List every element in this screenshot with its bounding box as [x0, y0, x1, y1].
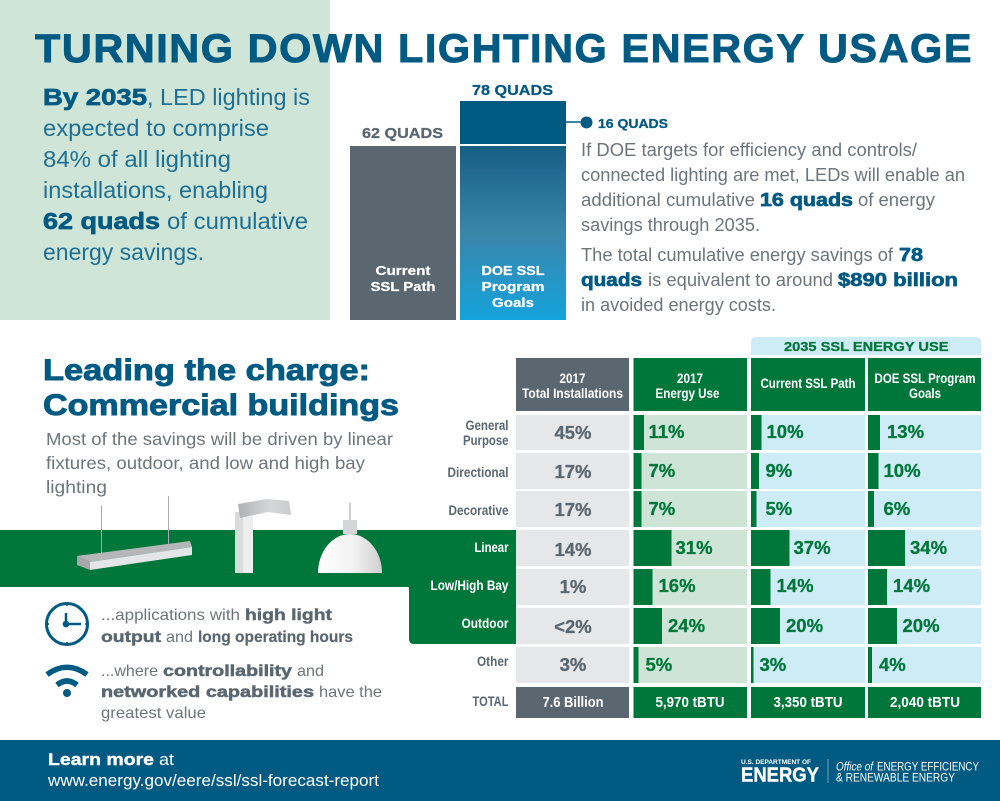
column: 2017 total installations: 45% [554, 422, 592, 443]
header tab: 2035 SSL energy use: 2035 SSL ENERGY USE [784, 339, 949, 354]
column: 2035 DOE SSL program goals: 4% [879, 654, 906, 675]
column: 2035 DOE SSL program goals: 2,040 tBTU [890, 695, 960, 711]
bar: current SSL path, 62 quads: SSL Path [370, 279, 436, 294]
column: 2035 DOE SSL program goals: 6% [884, 498, 910, 519]
text block: controllability [101, 663, 382, 722]
logo: U.S. Department of Energy: ENERGY [741, 764, 820, 786]
text block: controllability: greatest value [101, 705, 206, 722]
text block: high light output: high light [245, 607, 333, 624]
row labels: General [466, 418, 508, 433]
column: 2035 current SSL path: 3% [760, 654, 786, 675]
text block: 2035 forecast intro: energy savings. [43, 239, 204, 265]
column: 2017 total installations: 3% [560, 654, 586, 675]
bar chart: cumulative energy savings [350, 83, 668, 320]
bar: DOE SSL program goals, 78 quads: 78 QUADS [472, 83, 553, 99]
text block: additional savings explanation: $890 billion [838, 269, 958, 290]
column: 2035 DOE SSL program goals: Goals [909, 386, 941, 401]
column: 2017 total installations: Total Installations [522, 386, 623, 401]
text block: learn more link: at [159, 750, 174, 769]
row labels: Low/High Bay [430, 578, 509, 593]
text block: learn more link: Learn more [48, 750, 154, 769]
text block: additional savings explanation: 78 [899, 244, 923, 265]
column: 2035 current SSL path [751, 358, 865, 718]
row labels: Decorative [448, 503, 509, 518]
text block: 2035 forecast intro: expected to comprise [43, 115, 269, 141]
heading: leading the charge: Commercial buildings [43, 389, 399, 422]
text block: 2035 forecast intro: By 2035 [43, 84, 147, 110]
column: 2035 DOE SSL program goals: 34% [910, 537, 947, 558]
text block: additional savings explanation: 16 quads [760, 189, 853, 210]
logo: U.S. Department of Energy: Office of [836, 762, 875, 774]
title: TURNING DOWN LIGHTING ENERGY USAGE [35, 27, 973, 71]
bar: DOE SSL program goals, 78 quads [460, 83, 566, 320]
column: 2017 energy use: 24% [668, 615, 705, 636]
icon: outdoor pole fixture [235, 499, 291, 573]
row labels: Other [477, 654, 509, 669]
text block: additional savings explanation: The total cumulative energy savings of [581, 244, 894, 265]
column: 2017 energy use: 5% [646, 654, 672, 675]
logo: U.S. Department of Energy: ENERGY EFFICIENCY [877, 762, 979, 774]
header tab: 2035 SSL energy use [751, 337, 981, 355]
bar: DOE SSL program goals, 78 quads: Program [482, 279, 544, 294]
text block: high light output: and [166, 629, 193, 646]
icon: wifi [47, 667, 87, 697]
column: 2035 current SSL path: 9% [766, 460, 792, 481]
row labels: TOTAL [472, 694, 508, 709]
table: lighting use by application [430, 337, 981, 718]
text block: additional savings explanation: in avoided energy costs. [581, 294, 776, 315]
column: 2035 DOE SSL program goals: DOE SSL Program [874, 371, 976, 386]
column: 2017 total installations: 17% [554, 461, 592, 482]
text block: 2035 forecast intro: of cumulative [167, 208, 308, 234]
text block: 2035 forecast intro: installations, enabling [43, 177, 268, 203]
panel: green intro background [0, 0, 330, 320]
row labels [430, 418, 509, 709]
column: 2035 DOE SSL program goals: 14% [893, 575, 930, 596]
bar: current SSL path, 62 quads: Current [376, 263, 431, 278]
column: 2035 DOE SSL program goals: 10% [884, 460, 921, 481]
column: 2035 current SSL path: 10% [766, 421, 804, 442]
text block: 2035 forecast intro: 84% of all lighting [43, 146, 231, 172]
text block: savings drivers: lighting [46, 477, 107, 497]
column: 2017 total installations: <2% [554, 616, 592, 637]
column: 2017 energy use: 5,970 tBTU [656, 695, 724, 711]
text block: controllability: controllability [163, 663, 292, 680]
text block: additional savings explanation: If DOE targets for efficiency and controls/ [581, 139, 918, 160]
text block: high light output: output [101, 629, 162, 646]
column: 2017 energy use: Energy Use [656, 386, 720, 401]
row labels: Outdoor [462, 616, 509, 631]
column: 2035 current SSL path: 14% [776, 575, 814, 596]
text block: additional savings explanation: additional cumulative [581, 189, 755, 210]
bar: DOE SSL program goals, 78 quads: Goals [492, 295, 534, 310]
column: 2017 total installations: 1% [560, 576, 586, 597]
text block: high light output [101, 607, 353, 646]
panel: green highlight band [0, 530, 516, 644]
column: 2035 DOE SSL program goals: 13% [887, 421, 924, 442]
logo: U.S. Department of Energy [741, 759, 979, 786]
row labels: Purpose [463, 433, 509, 448]
column: 2035 current SSL path: 37% [794, 537, 831, 558]
text block: controllability: have the [319, 684, 382, 701]
text block: additional savings explanation: savings through 2035. [581, 214, 760, 235]
column: 2017 total installations: 2017 [560, 371, 586, 386]
text block: high light output: ...applications with [101, 607, 240, 624]
footer banner [0, 740, 1000, 801]
logo: U.S. Department of Energy: & RENEWABLE ENERGY [836, 772, 955, 784]
text block: learn more link: www.energy.gov/eere/ssl/ssl-forecast-report [47, 771, 379, 790]
text block: 2035 forecast intro [43, 84, 310, 265]
text block: high light output: long operating hours [198, 629, 353, 646]
heading: leading the charge: Leading the charge: [43, 354, 370, 387]
text block: additional savings explanation [581, 139, 965, 315]
column: 2017 energy use: 2017 [677, 371, 703, 386]
icon: clock [46, 603, 88, 645]
icon: linear fixture [77, 496, 192, 570]
row labels: Directional [448, 465, 508, 480]
text block: savings drivers: fixtures, outdoor, and low and high bay [46, 453, 365, 473]
column: 2035 current SSL path: 5% [766, 498, 792, 519]
text block: additional savings explanation: of energy [858, 189, 936, 210]
text block: controllability: and [297, 663, 324, 680]
text block: savings drivers [46, 429, 393, 497]
column: 2017 total installations: 14% [554, 539, 592, 560]
column: 2035 current SSL path: Current SSL Path [760, 376, 856, 391]
column: 2017 total installations [516, 358, 629, 718]
text block: 2035 forecast intro: , LED lighting is [147, 84, 310, 110]
column: 2017 energy use: 7% [648, 460, 675, 481]
column: 2035 DOE SSL program goals: 20% [902, 615, 940, 636]
bar: current SSL path, 62 quads: 62 QUADS [362, 126, 443, 142]
column: 2017 energy use: 7% [648, 498, 675, 519]
text block: additional savings explanation: is equivalent to around [648, 269, 833, 290]
text block: 2035 forecast intro: 62 quads [43, 208, 160, 234]
column: 2017 total installations: 17% [554, 499, 592, 520]
bar: current SSL path, 62 quads [350, 126, 456, 320]
text block: additional savings explanation: quads [581, 269, 642, 290]
text block: additional savings explanation: connected lighting are met, LEDs will enable an [581, 164, 965, 185]
text block: controllability: networked capabilities [101, 684, 314, 701]
text block: controllability: ...where [101, 663, 158, 680]
row labels: Linear [474, 540, 509, 555]
logo: U.S. Department of Energy: U.S. DEPARTMENT OF [741, 759, 811, 766]
column: 2017 energy use: 11% [648, 421, 685, 442]
column: 2035 DOE SSL program goals [868, 358, 981, 718]
column: 2017 energy use: 16% [658, 575, 696, 596]
text block: savings drivers: Most of the savings will be driven by linear [46, 429, 393, 449]
callout: 16 quads [566, 116, 668, 131]
text block: learn more link [47, 750, 379, 790]
heading: leading the charge [43, 354, 399, 422]
column: 2017 energy use [634, 358, 747, 718]
column: 2035 current SSL path: 3,350 tBTU [774, 695, 842, 711]
bar: DOE SSL program goals, 78 quads: DOE SSL [482, 263, 545, 278]
column: 2017 energy use: 31% [676, 537, 713, 558]
column: 2017 total installations: 7.6 Billion [542, 695, 604, 711]
callout: 16 quads: 16 QUADS [598, 117, 668, 131]
column: 2035 current SSL path: 20% [786, 615, 823, 636]
icon: high bay dome fixture [318, 503, 382, 573]
